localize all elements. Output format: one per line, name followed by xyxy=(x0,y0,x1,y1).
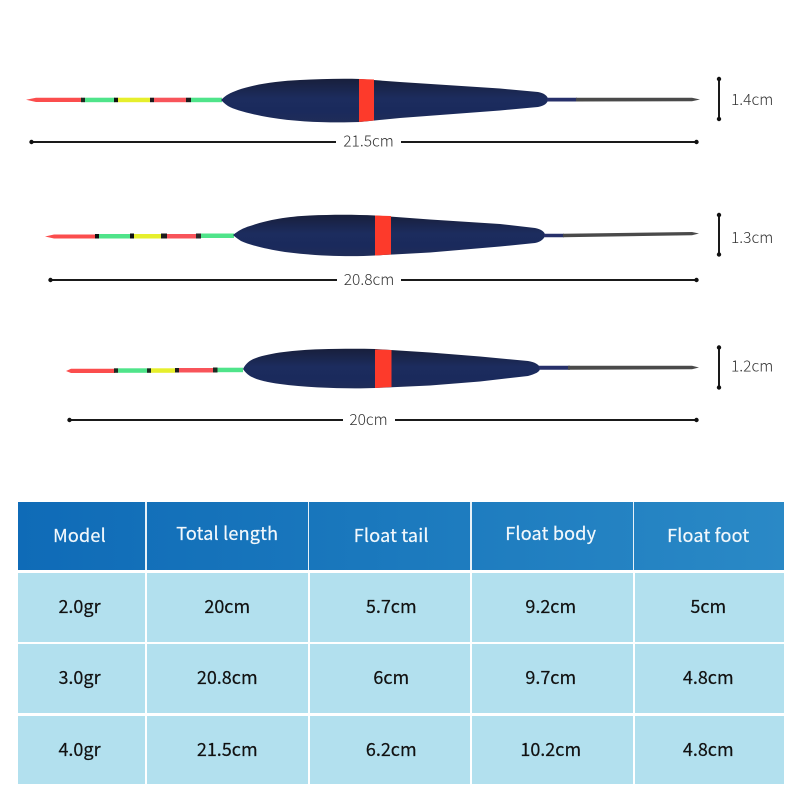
float 3 diameter label: 1.2cm xyxy=(731,354,773,376)
row 3.0gr float body: 9.7cm xyxy=(525,664,576,690)
row 4.0gr total length xyxy=(147,716,308,784)
float 3: 20cm xyxy=(66,345,773,430)
row 4.0gr float body: 10.2cm xyxy=(520,736,581,762)
float 1 body xyxy=(221,79,548,122)
row 3.0gr total length: 20.8cm xyxy=(197,664,258,690)
row 2.0gr float body: 9.2cm xyxy=(525,593,576,619)
float 1 diameter label: 1.4cm xyxy=(731,88,773,110)
row 3.0gr float tail xyxy=(310,644,470,713)
row 3.0gr: 3.0gr xyxy=(58,664,101,690)
float 2 length label: 20.8cm xyxy=(344,268,394,290)
row 3.0gr float foot: 4.8cm xyxy=(683,664,734,690)
float 3 body xyxy=(243,349,540,388)
header: Total length: Total length xyxy=(176,520,278,546)
row 3.0gr float body xyxy=(472,644,632,713)
float 2 diameter label: 1.3cm xyxy=(731,226,773,248)
row 2.0gr: 2.0gr xyxy=(58,593,101,619)
float 1 length line xyxy=(29,140,699,144)
float 1 diameter bracket xyxy=(717,77,721,121)
float 3 length line xyxy=(67,418,699,422)
row 2.0gr float foot: 5cm xyxy=(690,593,726,619)
float 2 length line xyxy=(48,278,699,282)
float 2 tail xyxy=(45,234,234,238)
float 2 diameter bracket xyxy=(717,213,721,257)
row 4.0gr float body xyxy=(472,716,632,784)
row 4.0gr float tail: 6.2cm xyxy=(366,736,417,762)
row 4.0gr xyxy=(18,716,145,784)
row 2.0gr float tail: 5.7cm xyxy=(366,593,417,619)
specification table xyxy=(18,502,784,784)
row 3.0gr xyxy=(18,644,145,713)
float 3 tail xyxy=(66,368,243,373)
float 1 tail xyxy=(26,98,222,102)
float 1 red band xyxy=(359,79,374,122)
row 2.0gr xyxy=(18,573,145,642)
float 2 red band xyxy=(375,216,391,256)
float 2 body xyxy=(233,215,545,256)
table header row xyxy=(18,502,784,570)
row 2.0gr total length: 20cm xyxy=(204,593,250,619)
row 2.0gr float foot xyxy=(634,573,784,642)
row 3.0gr total length xyxy=(147,644,308,713)
row 4.0gr: 4.0gr xyxy=(58,736,101,762)
float 2: 20.8cm xyxy=(45,213,773,290)
row 3.0gr float tail: 6cm xyxy=(373,664,409,690)
row 4.0gr total length: 21.5cm xyxy=(197,736,258,762)
float 3 foot xyxy=(539,366,699,370)
float 1: 21.5cm xyxy=(26,77,773,152)
header: Float body: Float body xyxy=(505,520,596,546)
header: Model: Model xyxy=(53,522,106,548)
row 2.0gr total length xyxy=(147,573,308,642)
row 3.0gr float foot xyxy=(634,644,784,713)
header: Float tail: Float tail xyxy=(354,522,429,548)
row 4.0gr float foot xyxy=(634,716,784,784)
row 4.0gr float foot: 4.8cm xyxy=(683,736,734,762)
row 2.0gr float body xyxy=(472,573,632,642)
float 1 foot xyxy=(547,98,700,102)
float 3 red band xyxy=(375,350,392,388)
row 2.0gr float tail xyxy=(310,573,470,642)
float diagrams xyxy=(26,76,773,430)
float 3 diameter bracket xyxy=(717,345,721,390)
float 1 length label: 21.5cm xyxy=(343,130,394,152)
header: Float foot: Float foot xyxy=(667,522,749,548)
row 4.0gr float tail xyxy=(310,716,470,784)
float 3 length label: 20cm xyxy=(349,408,388,430)
float 2 foot xyxy=(544,232,699,237)
